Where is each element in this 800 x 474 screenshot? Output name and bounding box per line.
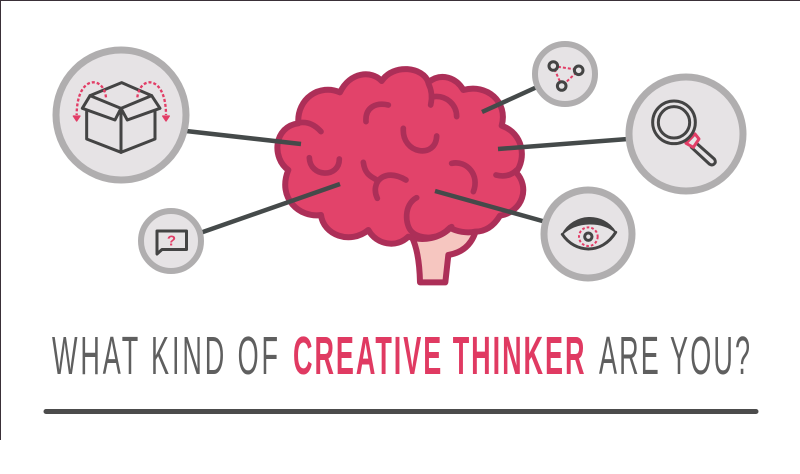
connector: box to brain bbox=[186, 131, 301, 144]
title: WHAT KIND OF bbox=[52, 326, 278, 387]
icon: magnifying glass bbox=[629, 77, 743, 191]
title bbox=[52, 326, 750, 387]
connector: eye to brain bbox=[435, 191, 546, 222]
icon: speech bubble with question mark: ? bbox=[167, 232, 176, 250]
icon: open box bbox=[56, 50, 186, 180]
brain stem bbox=[412, 225, 475, 282]
title: ARE YOU? bbox=[599, 326, 750, 387]
connector: network to brain bbox=[482, 87, 537, 112]
connector: magnifier to brain bbox=[498, 139, 628, 149]
icon: eye bbox=[544, 190, 632, 278]
icon: connected network nodes bbox=[535, 44, 595, 104]
connector: speech bubble to brain bbox=[200, 184, 340, 233]
icon: speech bubble with question mark bbox=[141, 211, 201, 271]
divider rule bbox=[46, 409, 756, 414]
brain body bbox=[277, 69, 523, 244]
title: CREATIVE THINKER bbox=[293, 326, 584, 387]
brain illustration bbox=[277, 69, 523, 282]
brain folds bbox=[299, 83, 517, 237]
